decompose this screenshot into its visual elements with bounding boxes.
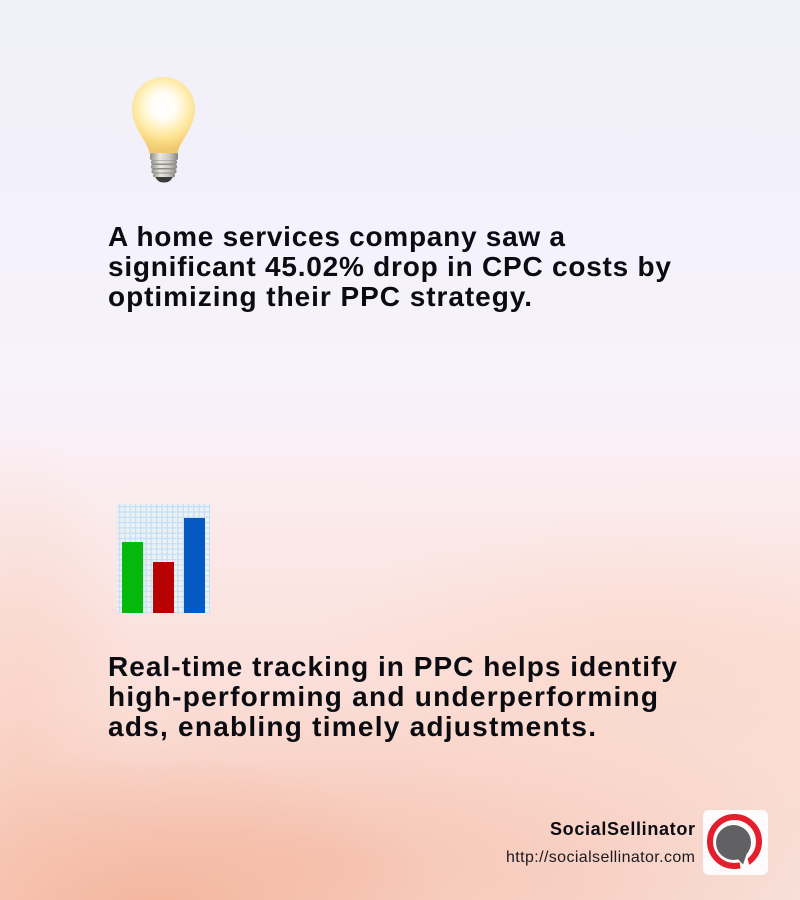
brand name: SocialSellinator [550, 819, 695, 839]
text block: real-time tracking: Real-time tracking in PPC helps identify [108, 651, 677, 682]
text block: CPC costs: optimizing their PPC strategy. [108, 281, 532, 312]
text block: CPC costs: significant 45.02% drop in CPC costs by [108, 251, 671, 282]
icon: light bulb [132, 77, 195, 182]
brand url: http://socialsellinator.com [506, 849, 695, 866]
icon: bar chart [117, 504, 210, 613]
text block: CPC costs: A home services company saw a [108, 221, 565, 252]
logo [703, 810, 768, 875]
text block: real-time tracking: high-performing and underperforming [108, 681, 658, 712]
text block: real-time tracking [108, 651, 677, 742]
text block: CPC costs [108, 221, 671, 312]
text block: real-time tracking: ads, enabling timely adjustments. [108, 711, 596, 742]
